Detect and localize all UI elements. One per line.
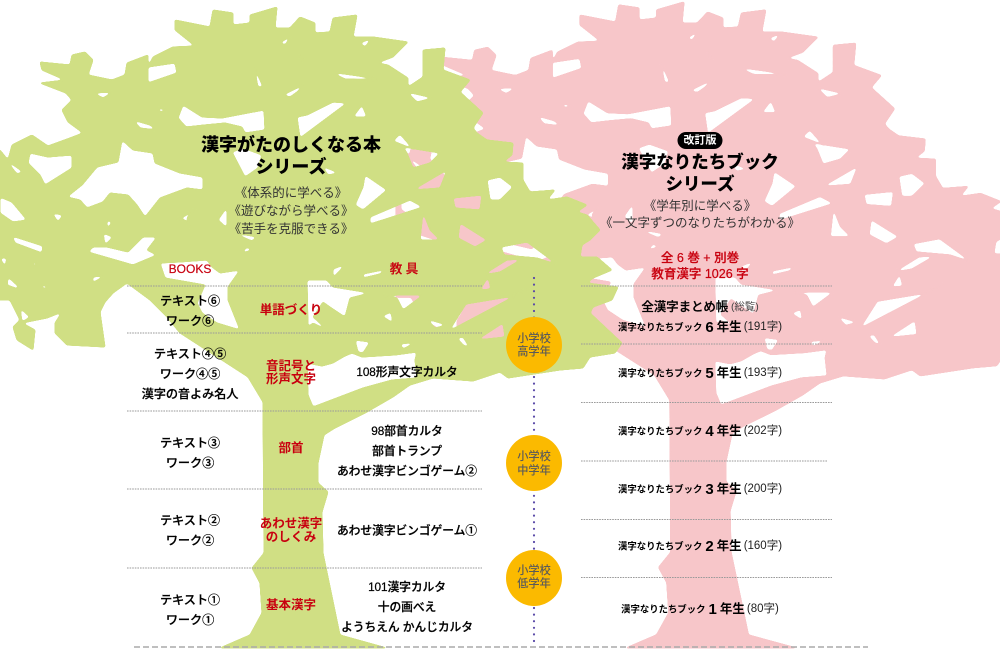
ground line [134,646,868,648]
column: topics on trunk: 基本漢字 [266,597,316,612]
column: teaching tools list: 十の画べえ [378,600,436,614]
column: grade books list [618,299,782,618]
dotted grade timeline [533,278,535,645]
column: topics on trunk: 部首 [278,440,304,455]
column: grade books list: 漢字なりたちブック3年生(200字) [618,480,782,498]
column: grade books list: 漢字なりたちブック1年生(80字) [621,600,779,618]
column: topics on trunk [260,302,322,612]
column: books list: ワーク① [166,613,214,627]
column: teaching tools list [337,365,477,634]
column: teaching tools list: 98部首カルタ [371,424,443,438]
text block: left series features [228,185,354,236]
text block: left series features: 《遊びながら学べる》 [228,203,354,218]
column: teaching tools list: あわせ漢字ビンゴゲーム② [337,464,477,478]
column: books list: 漢字の音よみ名人 [142,386,238,401]
column: teaching tools list: 108形声文字カルタ [356,365,458,379]
column: topics on trunk: 単語づくり [260,302,322,317]
badge: revised edition [678,132,722,149]
column: topics on trunk: あわせ漢字 [260,516,322,530]
text block: right series features: 《学年別に学べる》 [644,198,756,213]
column: topics on trunk: 音記号と [266,358,316,373]
text block: volumes and kanji count: 全 6 巻 + 別巻 [661,250,740,265]
heading: left series: シリーズ [255,156,327,177]
badge: middle grades [506,435,562,491]
heading: right series [621,152,779,194]
column: books list: ワーク⑥ [166,314,214,328]
row divider lines [127,286,832,578]
badge: upper grades [506,317,562,373]
text block: volumes and kanji count: 教育漢字 1026 字 [651,266,749,281]
column: topics on trunk: 形声文字 [266,371,316,386]
text block: volumes and kanji count [651,250,749,281]
badge: middle grades: 中学年 [517,463,551,477]
badge: upper grades: 高学年 [517,344,551,358]
column: books list: ワーク④⑤ [160,367,220,381]
column: teaching tools list: ようちえん かんじカルタ [341,620,473,634]
text block: left series features: 《苦手を克服できる》 [229,222,353,236]
text block: left series features: 《体系的に学べる》 [235,185,347,200]
heading: left series: 漢字がたのしくなる本 [201,134,381,155]
column: teaching tools list: 101漢字カルタ [368,580,446,594]
badge: revised edition: 改訂版 [684,132,716,146]
column: books list: テキスト③ [160,436,220,450]
column: grade books list: 漢字なりたちブック5年生(193字) [618,364,782,382]
column: grade books list: 漢字なりたちブック6年生(191字) [618,318,782,336]
heading: right series: 漢字なりたちブック [621,152,779,172]
badge: lower grades: 低学年 [517,576,551,590]
heading: right series: シリーズ [665,174,735,194]
column: grade books list: 漢字なりたちブック2年生(160字) [618,538,782,554]
column: teaching tools list: 部首トランプ [372,444,442,458]
column: grade books list: 全漢字まとめ帳 (総覧) [641,299,759,314]
column: books list: テキスト② [160,514,220,528]
column: grade books list: 漢字なりたちブック4年生(202字) [618,422,782,440]
column: books list: ワーク③ [166,456,214,470]
tree: pink kanji naritachi book tree [396,2,1000,648]
column: books list: テキスト① [160,593,220,607]
badge: lower grades [506,550,562,606]
text block: right series features [600,198,800,230]
column heading: books: BOOKS [169,262,211,276]
column: books list: ワーク② [166,534,214,548]
column: teaching tools list: あわせ漢字ビンゴゲーム① [337,524,477,538]
badge: upper grades: 小学校 [517,331,551,345]
heading: left series [201,134,381,177]
column: books list: テキスト⑥ [160,294,220,308]
tree: green kanji tanoshiku tree [0,7,622,648]
column heading: teaching tools: 教 具 [390,261,418,276]
column: books list [142,294,238,627]
column: topics on trunk: のしくみ [266,530,316,544]
column: books list: テキスト④⑤ [154,347,226,361]
badge: middle grades: 小学校 [517,449,551,463]
badge: lower grades: 小学校 [517,563,551,577]
text block: right series features: 《一文字ずつのなりたちがわかる》 [600,215,800,230]
